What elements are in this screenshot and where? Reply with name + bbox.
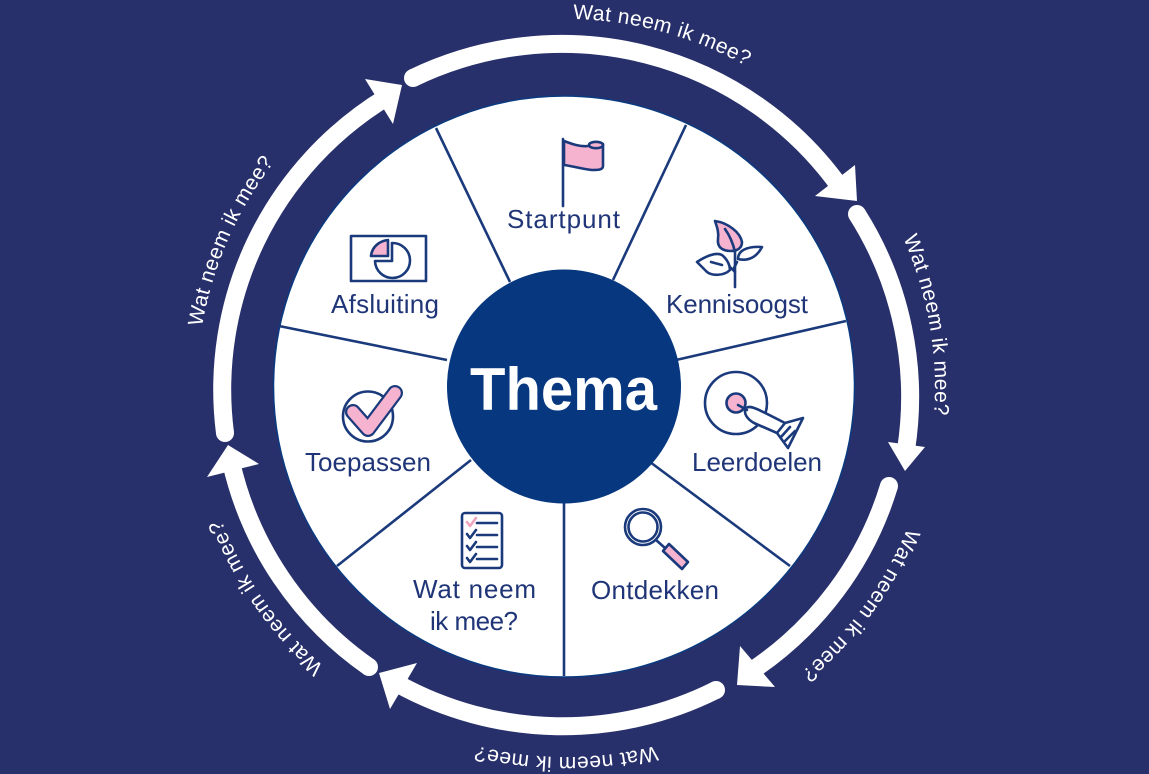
icon: magnifier	[625, 509, 688, 569]
segment: Afsluiting	[331, 236, 439, 319]
center hub	[447, 270, 681, 504]
cycle arrow 6	[216, 79, 402, 442]
ring label 2: Wat neem ik mee?	[904, 232, 950, 415]
label: Kennisoogst	[666, 289, 809, 319]
segment: Startpunt	[507, 139, 621, 234]
hub title: Thema	[470, 356, 658, 423]
segment: Kennisoogst	[666, 221, 809, 319]
segment: Wat neem ik mee	[413, 513, 536, 636]
cycle arrow 5	[207, 445, 378, 676]
segment: Leerdoelen	[692, 372, 822, 477]
ring label 5: Wat neem ik mee?	[209, 524, 320, 678]
segment: Ontdekken	[591, 509, 719, 605]
label: Startpunt	[507, 204, 621, 234]
icon: plant	[697, 221, 762, 287]
cycle arrow 1	[404, 44, 857, 201]
wheel disc with spokes	[274, 96, 854, 677]
icon: chart on screen	[351, 236, 426, 281]
icon: flag	[563, 139, 603, 206]
label: Ontdekken	[591, 575, 719, 605]
ring label 1: Wat neem ik mee?	[574, 4, 751, 64]
label: Toepassen	[305, 447, 431, 477]
icon: check badge	[343, 392, 395, 442]
segment: Toepassen	[305, 392, 431, 477]
label: Leerdoelen	[692, 447, 822, 477]
label second line: ik mee?	[430, 606, 518, 636]
ring label 3: Wat neem ik mee?	[805, 532, 921, 682]
icon: checklist	[462, 513, 502, 568]
cycle arrow 4	[379, 663, 725, 726]
cycle arrow 2	[848, 205, 925, 471]
cycle arrow 3	[737, 477, 898, 687]
label: Wat neem	[413, 574, 536, 604]
label: Afsluiting	[331, 289, 439, 319]
icon: target and dart	[705, 372, 803, 448]
ring label 6: Wat neem ik mee?	[188, 156, 271, 324]
